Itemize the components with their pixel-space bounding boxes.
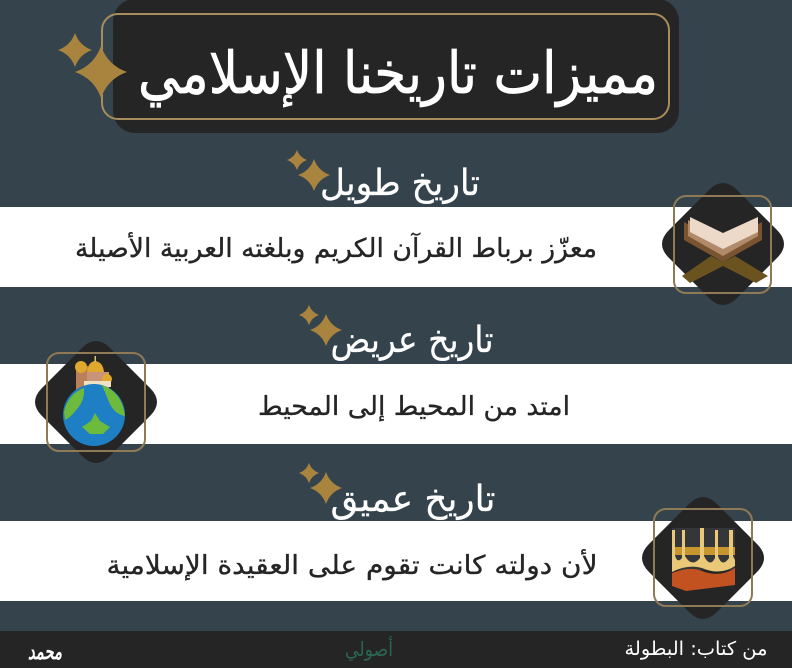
icon: globe with mosque	[35, 341, 157, 463]
source credit: من كتاب: البطولة	[624, 638, 768, 660]
panel: band 2	[0, 364, 792, 444]
text 1: معزّز برباط القرآن الكريم وبلغته العربية الأصيلة	[75, 231, 597, 264]
logo: أصولي	[345, 636, 393, 662]
text 3: لأن دولته كانت تقوم على العقيدة الإسلامية	[106, 548, 598, 581]
signature: محمد	[28, 640, 62, 665]
heading 3	[299, 463, 496, 520]
title panel	[58, 0, 679, 133]
footer bar	[0, 631, 792, 668]
panel: band 3	[0, 521, 792, 601]
text 2: امتد من المحيط إلى المحيط	[258, 392, 570, 422]
heading 2: تاريخ عريض	[330, 320, 494, 361]
heading 1	[287, 150, 480, 204]
panel: band 1	[0, 207, 792, 287]
icon: Kaaba	[642, 497, 764, 619]
heading 2	[299, 305, 494, 361]
heading 3: تاريخ عميق	[330, 479, 496, 520]
title: مميزات تاريخنا الإسلامي	[138, 39, 658, 108]
icon: Quran on stand	[662, 183, 784, 305]
heading 1: تاريخ طويل	[320, 163, 480, 204]
icon: title sparkles	[58, 33, 127, 98]
